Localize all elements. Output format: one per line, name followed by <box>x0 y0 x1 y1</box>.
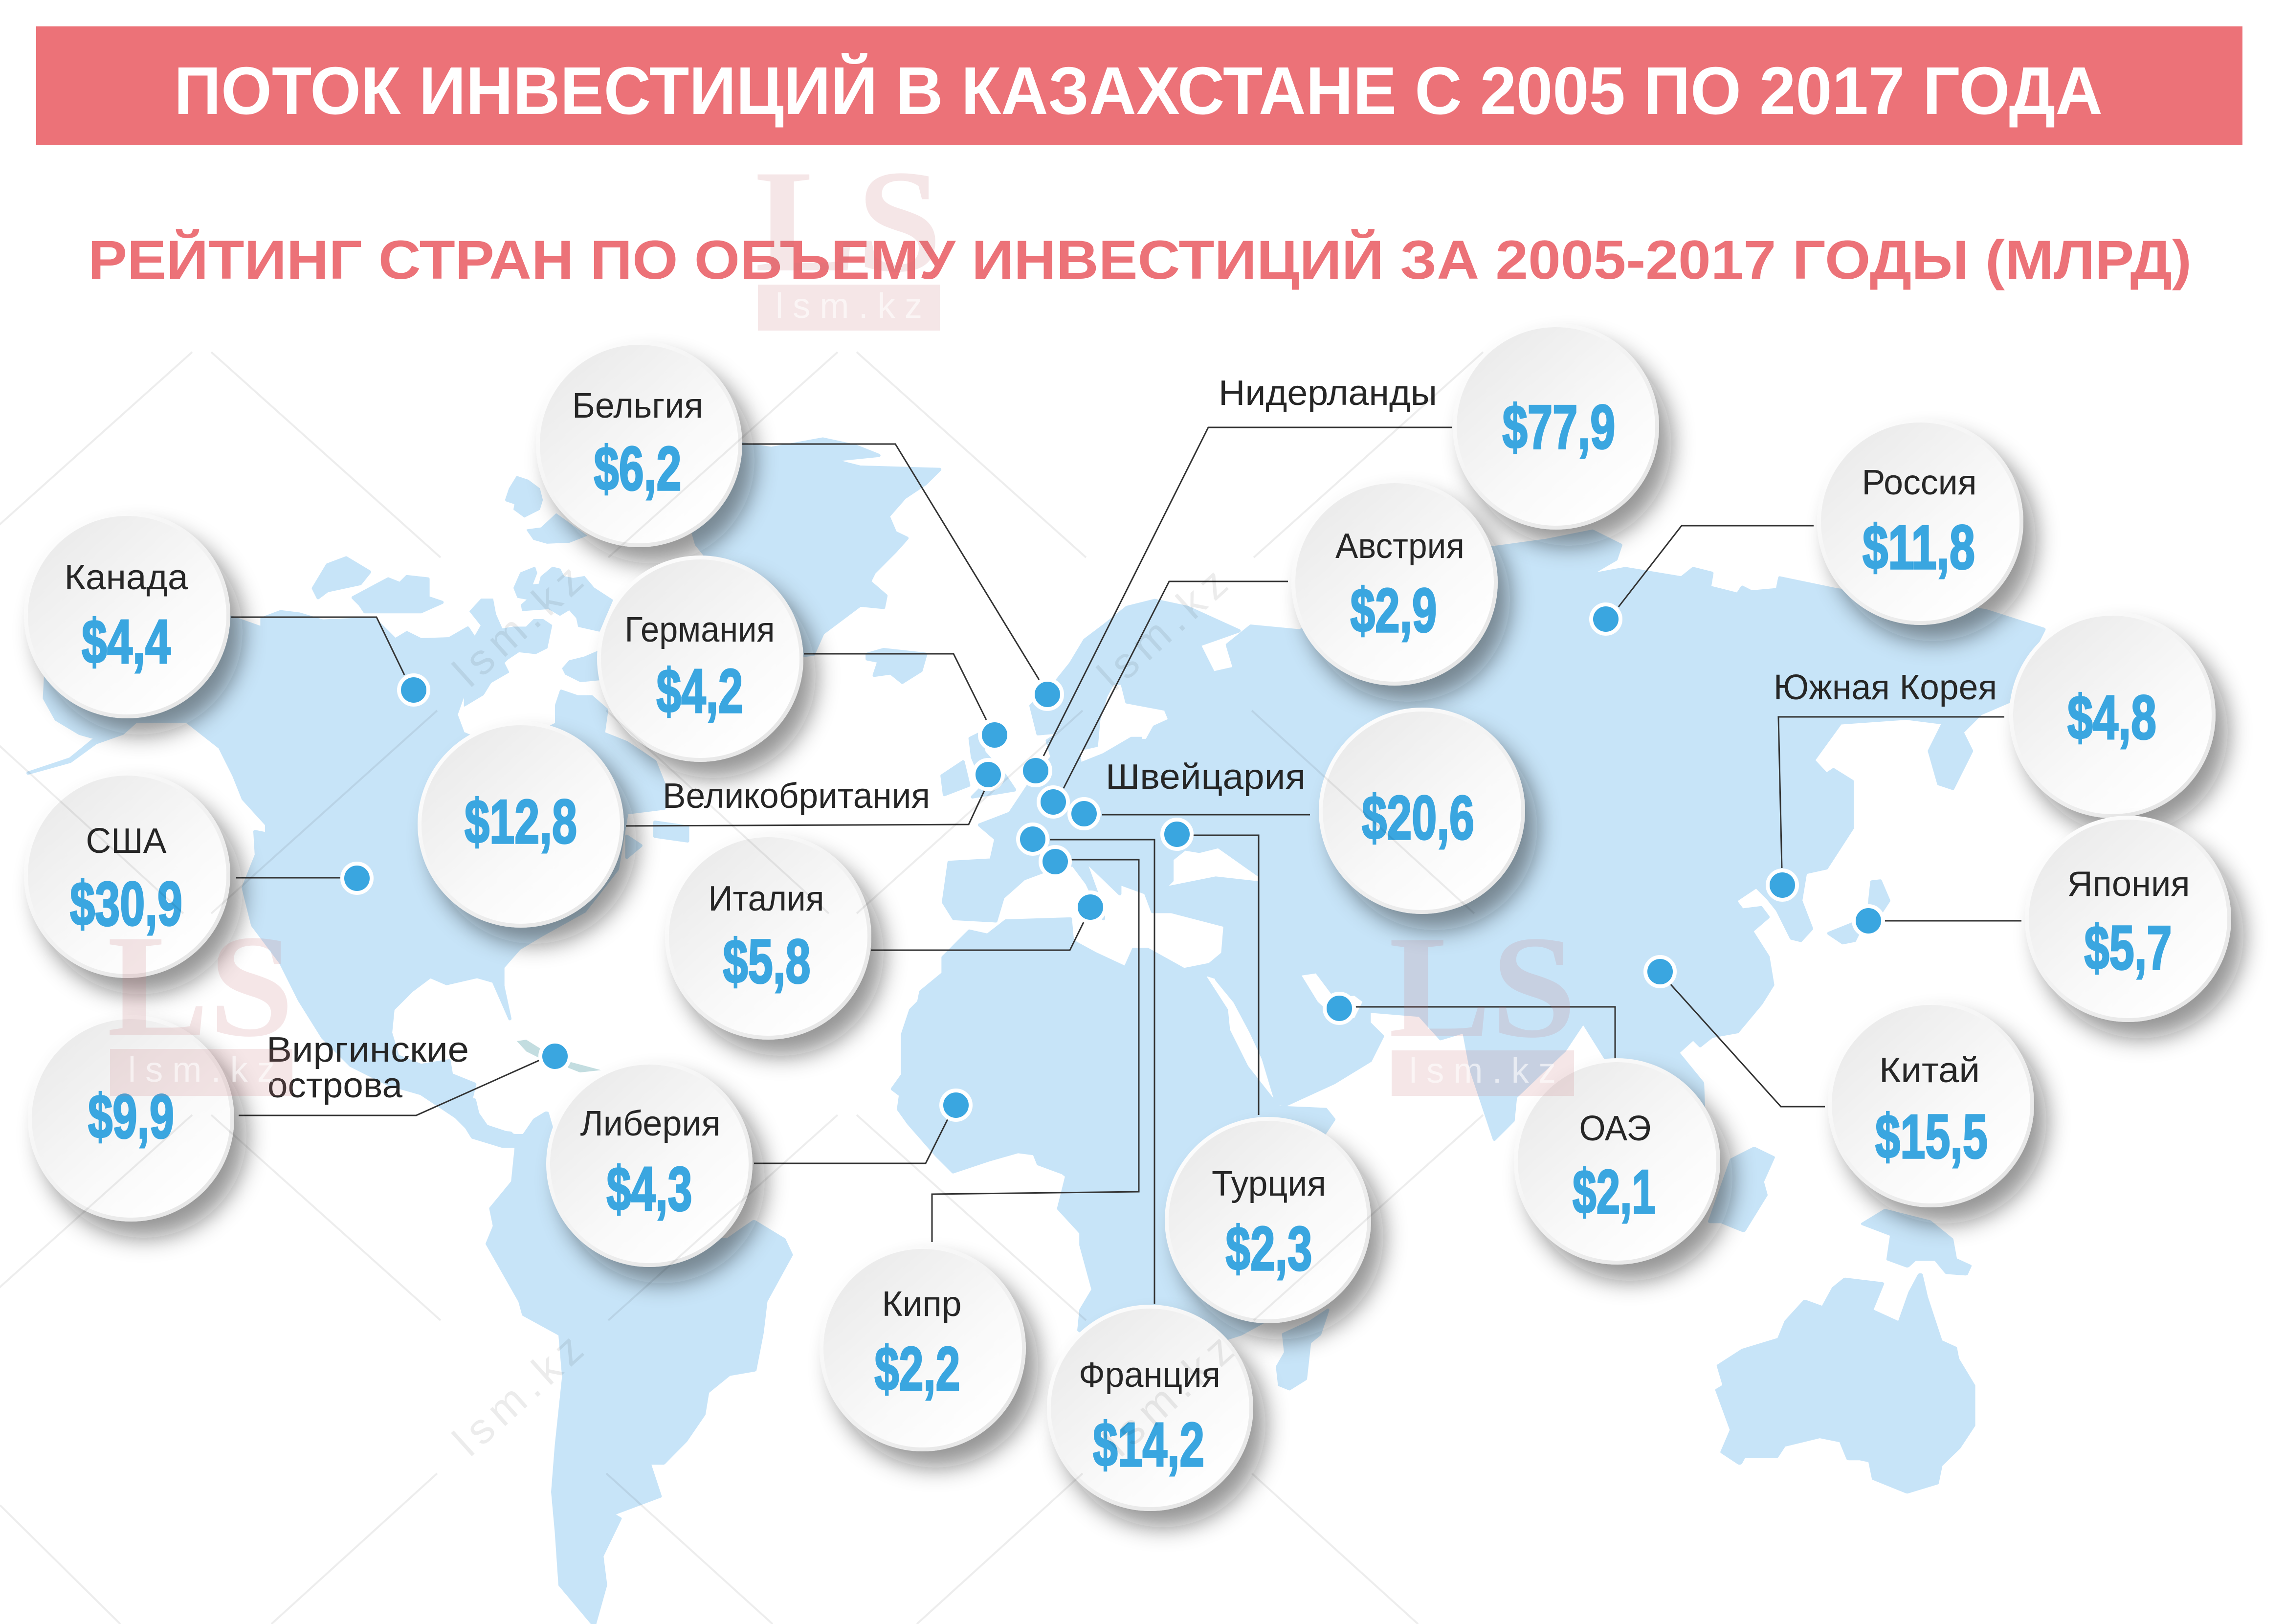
icon: Virgin Islands <box>517 1040 601 1072</box>
country: Виргинские острова: острова <box>267 1066 403 1105</box>
map seas <box>1142 711 1362 1020</box>
watermark lattice: lsm.kz <box>444 555 592 696</box>
location dots <box>342 604 1883 1120</box>
watermark lattice <box>0 352 1483 1624</box>
country: Бельгия <box>536 341 742 547</box>
country: Кипр: Кипр <box>882 1285 961 1324</box>
country: Германия: Германия <box>625 610 775 649</box>
country: Италия: $5,8 <box>723 927 811 996</box>
country: ОАЭ: ОАЭ <box>1579 1109 1651 1148</box>
country: Россия: $11,8 <box>1863 512 1975 582</box>
watermark lattice: lsm.kz <box>444 1324 592 1465</box>
country: Германия: $4,2 <box>656 656 743 726</box>
country: Нидерланды <box>1219 323 1659 530</box>
country: Россия <box>1817 419 2023 625</box>
country: Франция: $14,2 <box>1093 1410 1204 1479</box>
country: Турция: $2,3 <box>1225 1214 1312 1283</box>
country: Франция <box>1047 1305 1253 1511</box>
country: Китай: Китай <box>1879 1051 1980 1090</box>
title banner: ПОТОК ИНВЕСТИЦИЙ В КАЗАХСТАНЕ С 2005 ПО 2017 ГОДА <box>174 53 2103 129</box>
country: Италия <box>665 833 871 1040</box>
country: Япония: Япония <box>2067 865 2190 904</box>
country: Великобритания: $12,8 <box>465 787 577 856</box>
country: Либерия: $4,3 <box>606 1154 692 1224</box>
country: Виргинские острова <box>28 1015 469 1222</box>
country: США: $30,9 <box>70 869 182 938</box>
country: Италия: Италия <box>708 879 824 918</box>
country: Канада: $4,4 <box>82 607 171 676</box>
country: Нидерланды: $77,9 <box>1502 392 1616 462</box>
watermark logo top: LS <box>755 140 942 302</box>
country: Турция <box>1165 1117 1371 1323</box>
country: Австрия <box>1291 479 1498 686</box>
country: Швейцария: $20,6 <box>1362 783 1474 852</box>
country: ОАЭ <box>1514 1058 1720 1265</box>
country: США <box>24 772 230 978</box>
country: Либерия <box>546 1061 753 1267</box>
country: Виргинские острова: $9,9 <box>88 1082 174 1151</box>
country: Австрия: Австрия <box>1335 527 1464 566</box>
arctic islands and Greenland edge <box>465 477 612 706</box>
world map <box>28 439 2044 1624</box>
watermark logo right: lsm.kz <box>1409 1051 1556 1090</box>
country: Великобритания <box>418 721 930 928</box>
country: Виргинские острова: Виргинские <box>266 1030 469 1069</box>
country: Бельгия: Бельгия <box>572 386 703 425</box>
country: Великобритания: Великобритания <box>663 777 930 816</box>
country: Китай: $15,5 <box>1875 1102 1988 1171</box>
watermark lattice: lsm.kz <box>1094 1325 1242 1466</box>
country: Канада <box>24 512 230 718</box>
country: Швейцария: Швейцария <box>1106 757 1306 797</box>
country: Австрия: $2,9 <box>1351 576 1437 645</box>
country: Франция: Франция <box>1079 1356 1220 1395</box>
watermark lattice: lsm.kz <box>1088 558 1237 699</box>
leader lines <box>231 427 2021 1304</box>
country: Либерия: Либерия <box>580 1104 721 1143</box>
watermark logo right: LS <box>1389 906 1576 1068</box>
country: Россия: Россия <box>1862 463 1976 502</box>
country: Китай <box>1828 1001 2034 1207</box>
country: США: США <box>86 822 166 861</box>
country: Япония: $5,7 <box>2084 913 2172 982</box>
watermark logo left: lsm.kz <box>128 1050 275 1090</box>
title banner <box>36 26 2242 145</box>
country: Южная Корея <box>1774 612 2216 818</box>
watermark logo top: lsm.kz <box>776 287 922 326</box>
country: Кипр <box>820 1245 1026 1451</box>
country: Кипр: $2,2 <box>874 1334 960 1403</box>
subtitle: РЕЙТИНГ СТРАН ПО ОБЪЕМУ ИНВЕСТИЦИЙ ЗА 2005-2017 ГОДЫ (МЛРД) <box>88 229 2192 290</box>
country: ОАЭ: $2,1 <box>1573 1157 1656 1226</box>
country: Южная Корея: $4,8 <box>2067 683 2156 752</box>
country: Нидерланды: Нидерланды <box>1219 374 1437 413</box>
country: Канада: Канада <box>65 558 188 597</box>
country: Турция: Турция <box>1212 1164 1326 1203</box>
country: Япония <box>2025 816 2231 1022</box>
country: Германия <box>597 556 803 762</box>
country: Бельгия: $6,2 <box>594 434 682 503</box>
watermark logo left: LS <box>107 905 294 1067</box>
country: Южная Корея: Южная Корея <box>1774 668 1997 707</box>
country: Швейцария <box>1106 708 1525 914</box>
